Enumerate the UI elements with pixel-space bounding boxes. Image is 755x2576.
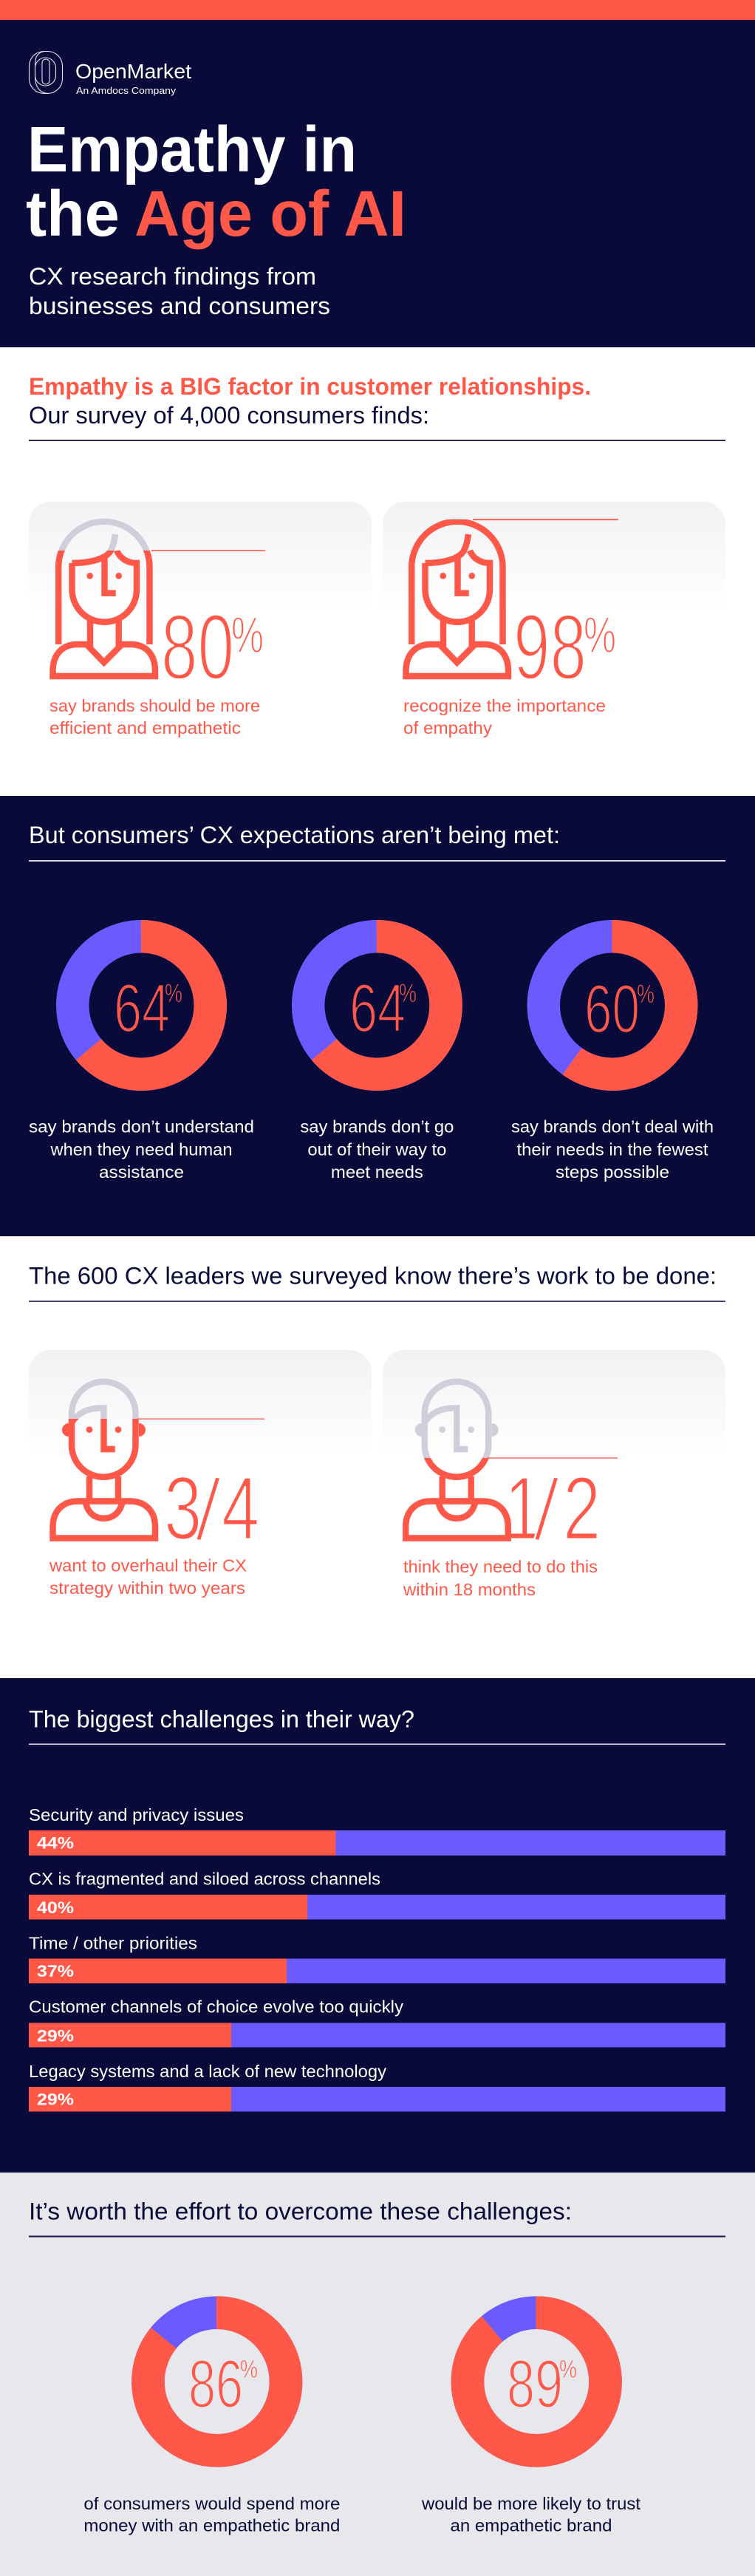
caption line 2: when they need human <box>49 1139 232 1159</box>
subtitle: CX research findings from <box>29 263 316 290</box>
donut chart: 64 percent: % <box>165 979 182 1008</box>
caption: want to overhaul their CX <box>49 1556 247 1575</box>
caption <box>49 1556 247 1598</box>
card: three quarters <box>29 1350 372 1598</box>
panel: expectations not met <box>0 796 755 1236</box>
caption line 3: assistance <box>99 1162 184 1182</box>
donut chart: 64 percent <box>72 936 211 1074</box>
caption: an empathetic brand <box>451 2516 612 2535</box>
donut chart: 64 percent second: % <box>399 979 417 1008</box>
stat: 1/2: 1/2 <box>505 1458 601 1561</box>
donut chart: 60 percent: 60 <box>584 970 640 1047</box>
panel: header <box>0 20 755 347</box>
caption <box>403 696 606 737</box>
stat: 80%: 80 <box>161 596 234 699</box>
title: Empathy in <box>27 114 357 185</box>
bar: security and privacy 44: Security and privacy issues <box>29 1805 244 1824</box>
caption: think they need to do this <box>403 1557 598 1576</box>
caption <box>421 2494 641 2535</box>
donut chart: 89 percent <box>468 2313 606 2450</box>
caption line 3: meet needs <box>331 1162 423 1182</box>
bar: channels evolve 29: Customer channels of choice evolve too quickly <box>29 1997 404 2017</box>
heading: The 600 CX leaders we surveyed know there’s work to be done: <box>29 1262 717 1289</box>
donut chart: 86 percent <box>148 2313 286 2450</box>
stat: 80%: % <box>231 606 264 664</box>
bar: fragmented CX 40: 40% <box>37 1898 74 1917</box>
heading: empathy factor: Our survey of 4,000 consumers finds: <box>29 402 429 429</box>
donut chart: 64 percent second: 64 <box>349 970 406 1046</box>
caption: say brands should be more <box>49 696 260 715</box>
card: 80 percent <box>29 502 372 737</box>
donut chart: 86 percent: % <box>240 2356 258 2384</box>
bar: fragmented CX 40 <box>29 1870 725 1920</box>
bar: security and privacy 44 <box>29 1805 725 1856</box>
caption: money with an empathetic brand <box>83 2516 340 2535</box>
card: 98 percent <box>383 502 725 737</box>
caption: strategy within two years <box>49 1578 245 1598</box>
caption: say brands don’t deal with <box>511 1117 714 1137</box>
title <box>26 114 406 250</box>
caption <box>403 1557 598 1599</box>
icon: woman 98% filled <box>406 519 618 676</box>
bar: channels evolve 29 <box>29 1997 725 2047</box>
donut chart: 64 percent second <box>308 936 446 1074</box>
caption <box>83 2494 340 2535</box>
bar: time 37: 37% <box>37 1962 74 1980</box>
title: the Age of AI <box>26 178 406 250</box>
caption: say brands don’t understand <box>29 1117 254 1137</box>
caption line 2: their needs in the fewest <box>517 1139 708 1159</box>
logo: OpenMarket <box>30 52 191 96</box>
donut chart: 89 percent: 89 <box>507 2347 563 2422</box>
icon: woman 80% filled <box>53 522 265 676</box>
heading: The biggest challenges in their way? <box>29 1706 414 1732</box>
heading: empathy factor <box>29 373 725 441</box>
caption: within 18 months <box>403 1580 536 1599</box>
bar: fragmented CX 40: CX is fragmented and siloed across channels <box>29 1870 380 1889</box>
donut chart: 86 percent: 86 <box>188 2347 243 2422</box>
stat: 98%: 98 <box>513 596 587 699</box>
donut chart: 60 percent <box>544 936 681 1074</box>
top accent bar <box>0 0 755 20</box>
caption <box>49 696 260 737</box>
caption: say brands don’t go <box>300 1117 454 1137</box>
heading: But consumers’ CX expectations aren’t being met: <box>29 822 560 848</box>
subtitle: businesses and consumers <box>29 293 330 319</box>
icon: man three quarters filled <box>53 1382 264 1539</box>
caption: recognize the importance <box>403 696 606 715</box>
donut chart: 60 percent: % <box>637 980 655 1009</box>
donut chart: 89 percent: % <box>559 2356 577 2384</box>
caption line 3: steps possible <box>556 1162 669 1182</box>
bar: legacy systems 29 <box>29 2062 725 2112</box>
panel: consumer survey <box>29 373 725 737</box>
bar: legacy systems 29: 29% <box>37 2090 74 2109</box>
bar: time 37 <box>29 1933 725 1983</box>
panel: CX leaders <box>29 1262 725 1599</box>
bar: security and privacy 44: 44% <box>37 1834 74 1853</box>
panel: worth the effort <box>0 2173 755 2576</box>
bar: legacy systems 29: Legacy systems and a lack of new technology <box>29 2062 387 2081</box>
card: one half <box>383 1350 725 1599</box>
subtitle <box>29 263 330 319</box>
caption: of empathy <box>403 718 493 737</box>
heading: empathy factor: Empathy is a BIG factor in customer relationships. <box>29 373 591 400</box>
caption: of consumers would spend more <box>83 2494 340 2513</box>
donut chart: 64 percent: 64 <box>114 970 170 1046</box>
bar: time 37: Time / other priorities <box>29 1933 197 1952</box>
caption: would be more likely to trust <box>421 2494 641 2513</box>
stat: 98%: % <box>584 606 616 664</box>
heading: It’s worth the effort to overcome these challenges: <box>29 2198 572 2224</box>
stat: 3/4: 3/4 <box>164 1458 259 1561</box>
bar: channels evolve 29: 29% <box>37 2026 74 2045</box>
icon: man half filled <box>406 1382 618 1539</box>
panel: biggest challenges <box>0 1678 755 2173</box>
caption: efficient and empathetic <box>49 718 241 737</box>
logo: OpenMarket: An Amdocs Company <box>76 86 177 96</box>
caption line 2: out of their way to <box>307 1139 446 1159</box>
logo: OpenMarket: OpenMarket <box>75 60 191 83</box>
